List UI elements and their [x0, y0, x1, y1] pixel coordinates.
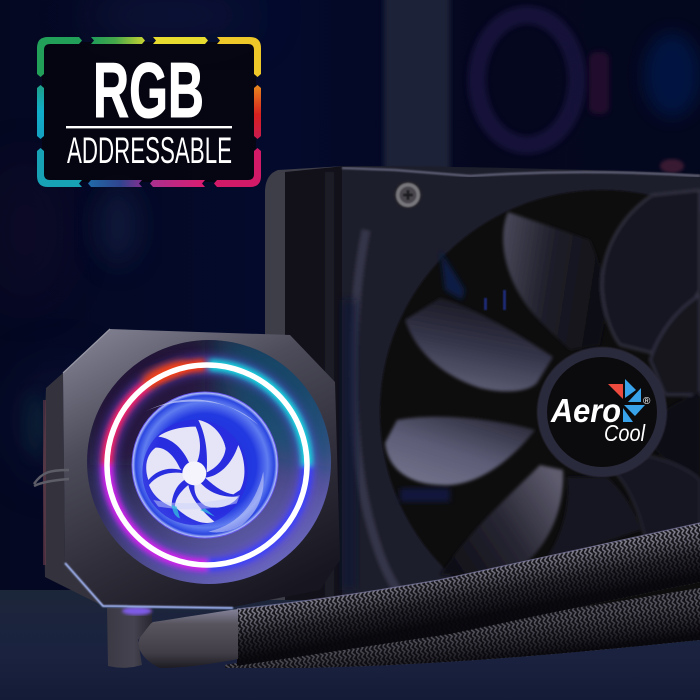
- glass window: [132, 392, 278, 538]
- fan hub: [537, 347, 667, 477]
- logo: AeroCool: ®: [643, 396, 651, 407]
- logo: AeroCool: Aero: [550, 392, 621, 429]
- impeller: [142, 399, 264, 532]
- divider line: [66, 126, 232, 128]
- block side: [43, 373, 105, 607]
- subheading: ADDRESSABLE: ADDRESSABLE: [67, 130, 232, 171]
- dark ring disc: [86, 335, 340, 585]
- block front: [63, 329, 340, 607]
- fan opening with radiator fins: [380, 190, 700, 634]
- lower hose: [225, 588, 700, 668]
- radiator side frame: [265, 166, 345, 600]
- heading: RGB: RGB: [93, 46, 204, 134]
- upper hose: [237, 523, 700, 666]
- purple elbow glow: [122, 607, 152, 615]
- side cable: [34, 470, 69, 486]
- impeller hub: [182, 461, 206, 485]
- badge: RGB Addressable: [37, 37, 261, 187]
- radiator and fan: [265, 166, 700, 634]
- fan frame: [342, 166, 700, 610]
- pump block: [34, 329, 340, 608]
- elbow connector: [107, 608, 152, 668]
- rainbow frame segments: [37, 37, 261, 187]
- table surface: [0, 590, 700, 700]
- ring glow arcs: [107, 365, 307, 565]
- logo: AeroCool: Cool: [604, 420, 646, 446]
- LED ring: [107, 357, 307, 565]
- mounting screw: [394, 181, 422, 209]
- hose sleeve: [138, 609, 238, 668]
- logo: AeroCool: [550, 379, 651, 446]
- fan blades: [385, 190, 700, 575]
- coolant hoses: [107, 523, 700, 668]
- badge panel: [42, 42, 256, 182]
